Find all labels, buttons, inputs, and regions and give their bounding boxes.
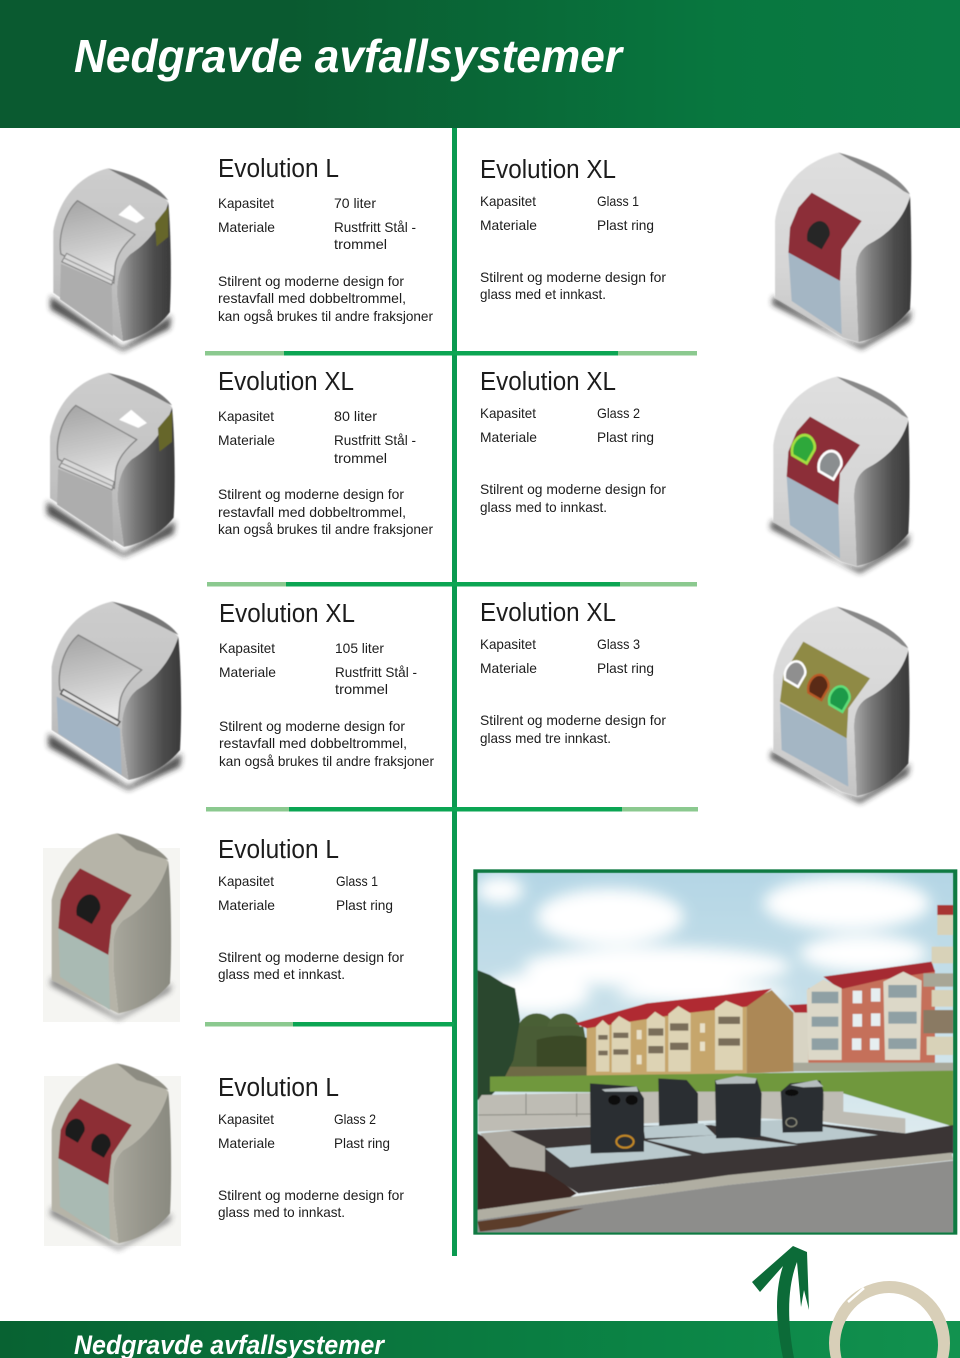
- main title: Nedgravde avfallsystemer: [74, 30, 624, 82]
- specification and description: Kapasitet: [480, 637, 536, 652]
- specification and description: Kapasitet: [218, 1112, 274, 1127]
- horizontal divider row 4: [205, 1022, 454, 1026]
- mulch: [477, 1133, 577, 1210]
- right tower balconies: [923, 905, 953, 1055]
- specification and description: Materiale: [218, 898, 275, 913]
- specification and description: Stilrent og moderne design for: [480, 482, 666, 497]
- panel: Evolution XL Glass 3: [480, 599, 666, 746]
- specification and description: Glass 2: [597, 406, 640, 421]
- specification and description: 70 liter: [334, 196, 376, 211]
- asphalt: [510, 1123, 953, 1193]
- specification and description: Materiale: [480, 430, 537, 445]
- specification and description: restavfall med dobbeltrommel,: [218, 505, 406, 520]
- specification and description: Plast ring: [597, 661, 654, 676]
- specification and description: Glass 3: [597, 637, 640, 652]
- specification and description: Plast ring: [334, 1136, 390, 1151]
- trees: [518, 1012, 552, 1028]
- icon: glass bin XL one opening: [772, 153, 912, 349]
- specification and description: Glass 1: [336, 874, 378, 889]
- brick block: [808, 970, 935, 1063]
- specification and description: Stilrent og moderne design for: [219, 719, 405, 734]
- specification and description: Kapasitet: [218, 196, 274, 211]
- specification and description: Rustfritt Stål -: [334, 220, 416, 235]
- yellow block: [587, 1005, 747, 1076]
- stone wall: [478, 1092, 905, 1133]
- heading: Evolution L: [218, 836, 339, 864]
- icon: steel drum bin 70 liter: [50, 168, 171, 351]
- specification and description: Kapasitet: [218, 409, 274, 424]
- icon: steel drum bin 105 liter: [48, 602, 182, 790]
- icon: glass bin L one opening: [43, 833, 180, 1022]
- road: [477, 1161, 953, 1233]
- panel: Evolution L 70 liter: [218, 155, 433, 324]
- specification and description: glass med et innkast.: [480, 287, 606, 302]
- specification and description: trommel: [334, 237, 387, 252]
- specification and description: Materiale: [218, 220, 275, 235]
- specification and description: [219, 641, 434, 769]
- specification and description: [480, 637, 666, 746]
- specification and description: Rustfritt Stål -: [334, 433, 416, 448]
- specification and description: 105 liter: [335, 641, 384, 656]
- photo: installed bins in front of apartment blocks: [473, 869, 957, 1235]
- panel: Evolution XL 105 liter: [219, 600, 434, 769]
- foundation strip: [793, 1063, 953, 1071]
- specification and description: Materiale: [219, 665, 276, 680]
- specification and description: Plast ring: [597, 430, 654, 445]
- specification and description: restavfall med dobbeltrommel,: [218, 291, 406, 306]
- specification and description: [480, 406, 666, 515]
- specification and description: Stilrent og moderne design for: [218, 274, 404, 289]
- icon: glass bin XL three openings: [770, 607, 910, 803]
- specification and description: Stilrent og moderne design for: [480, 713, 666, 728]
- specification and description: Materiale: [218, 1136, 275, 1151]
- horizontal divider row 3: [206, 807, 698, 812]
- heading: Evolution XL: [480, 368, 616, 396]
- specification and description: kan også brukes til andre fraksjoner: [218, 309, 433, 324]
- heading: Evolution L: [218, 155, 339, 183]
- specification and description: Plast ring: [597, 218, 654, 233]
- specification and description: kan også brukes til andre fraksjoner: [218, 522, 433, 537]
- four underground bins: [590, 1078, 823, 1153]
- icon: glass bin XL two openings: [770, 377, 910, 573]
- heading: Evolution L: [218, 1074, 339, 1102]
- grass: [490, 1071, 953, 1127]
- light pads: [545, 1141, 692, 1167]
- specification and description: [480, 194, 666, 302]
- vertical green divider: [452, 128, 457, 1256]
- specification and description: Materiale: [480, 661, 537, 676]
- specification and description: Glass 2: [334, 1112, 376, 1127]
- specification and description: Rustfritt Stål -: [335, 665, 417, 680]
- icon: steel drum bin 80 liter: [47, 373, 175, 557]
- specification and description: Stilrent og moderne design for: [218, 950, 404, 965]
- specification and description: glass med to innkast.: [480, 500, 607, 515]
- specification and description: trommel: [335, 682, 388, 697]
- specification and description: [218, 196, 433, 324]
- stone block: [480, 1131, 545, 1172]
- heading: Evolution XL: [218, 368, 354, 396]
- logo: green arrow: [752, 1246, 809, 1358]
- panel: Evolution XL 80 liter: [218, 368, 433, 537]
- specification and description: Stilrent og moderne design for: [218, 487, 404, 502]
- curb: [477, 1153, 953, 1220]
- specification and description: trommel: [334, 451, 387, 466]
- specification and description: 80 liter: [334, 409, 377, 424]
- logo: beige ring: [829, 1281, 950, 1358]
- specification and description: kan også brukes til andre fraksjoner: [219, 754, 434, 769]
- heading: Evolution XL: [480, 156, 616, 184]
- specification and description: Plast ring: [336, 898, 393, 913]
- specification and description: Kapasitet: [218, 874, 274, 889]
- panel: Evolution L Glass 1: [218, 836, 404, 982]
- horizontal divider row 2: [207, 582, 697, 586]
- specification and description: restavfall med dobbeltrommel,: [219, 736, 407, 751]
- specification and description: Stilrent og moderne design for: [480, 270, 666, 285]
- footer banner: [0, 1321, 960, 1358]
- specification and description: glass med tre innkast.: [480, 731, 611, 746]
- specification and description: Kapasitet: [480, 406, 536, 421]
- middle block: [793, 1007, 810, 1063]
- panel: Evolution XL Glass 2: [480, 368, 666, 515]
- heading: Evolution XL: [480, 599, 616, 627]
- specification and description: Kapasitet: [480, 194, 536, 209]
- heading: Evolution XL: [219, 600, 355, 628]
- specification and description: glass med to innkast.: [218, 1205, 345, 1220]
- horizontal divider row 1: [205, 351, 697, 356]
- specification and description: [218, 409, 433, 537]
- header banner: [0, 0, 960, 128]
- specification and description: Glass 1: [597, 194, 639, 209]
- panel: Evolution L Glass 2: [218, 1074, 404, 1220]
- specification and description: Materiale: [480, 218, 537, 233]
- specification and description: Kapasitet: [219, 641, 275, 656]
- specification and description: [218, 874, 404, 982]
- specification and description: Stilrent og moderne design for: [218, 1188, 404, 1203]
- specification and description: Materiale: [218, 433, 275, 448]
- panel: Evolution XL Glass 1: [480, 156, 666, 302]
- specification and description: [218, 1112, 404, 1220]
- icon: glass bin L two openings: [44, 1063, 181, 1250]
- specification and description: glass med et innkast.: [218, 967, 345, 982]
